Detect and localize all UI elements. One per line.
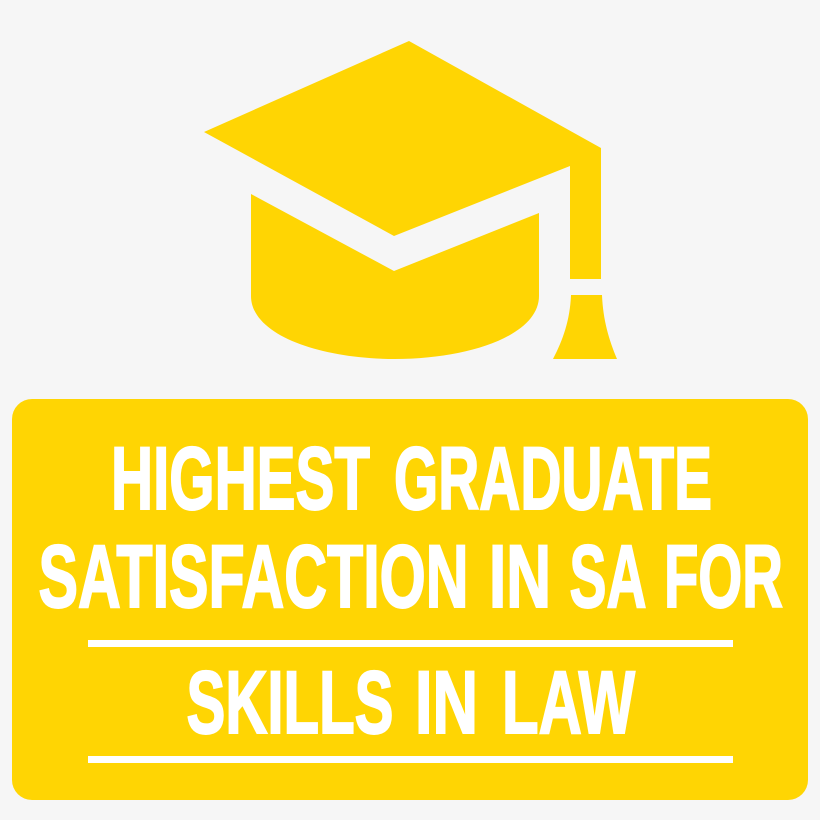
icon: graduation cap bbox=[204, 41, 617, 359]
heading line 2: SA bbox=[570, 526, 646, 626]
heading line 2: IN bbox=[489, 526, 551, 626]
heading line 1: HIGHEST bbox=[111, 428, 370, 528]
heading line 1 bbox=[111, 428, 712, 528]
banner panel bbox=[12, 399, 808, 800]
subheading: SKILLS bbox=[186, 652, 394, 752]
heading line 2: SATISFACTION bbox=[38, 526, 468, 626]
subheading: IN bbox=[415, 652, 478, 752]
subheading: LAW bbox=[502, 652, 635, 752]
